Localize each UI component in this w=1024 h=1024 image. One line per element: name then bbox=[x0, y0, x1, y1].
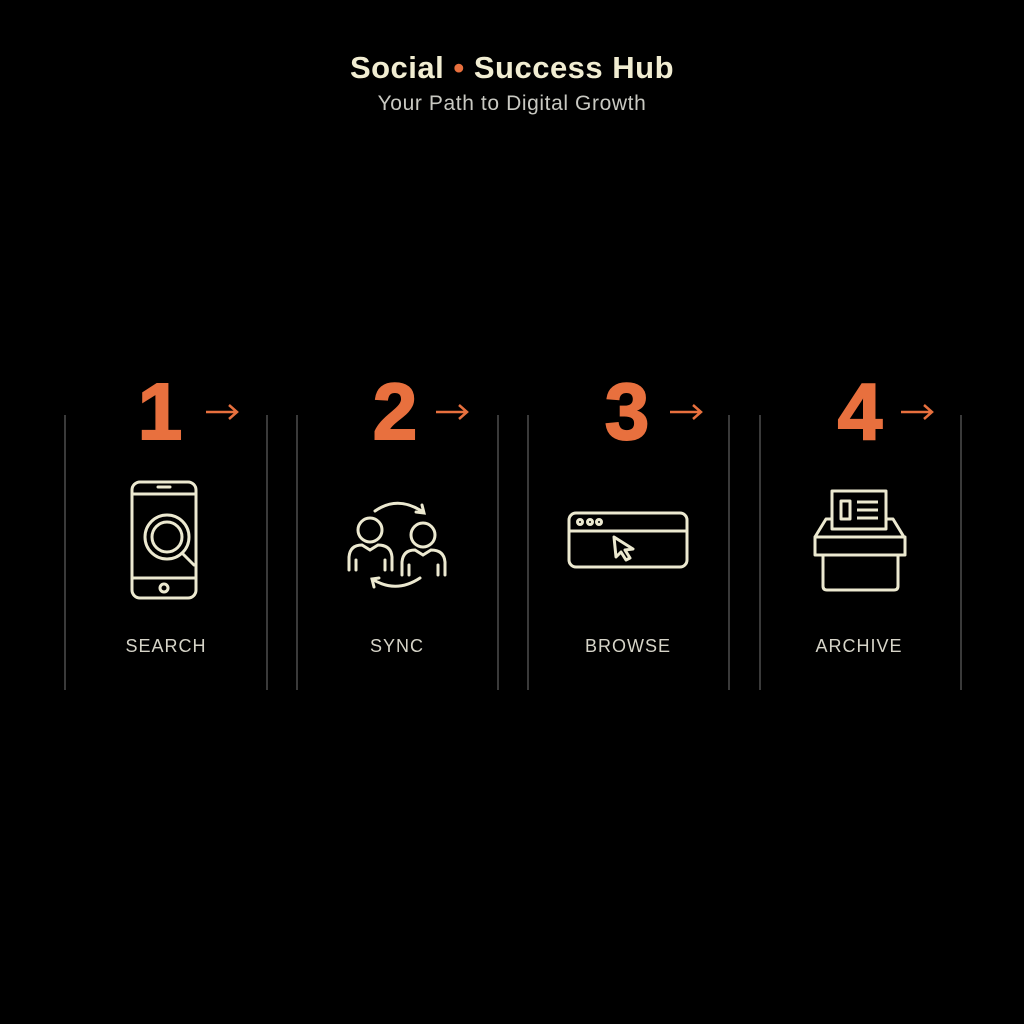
step 1 bbox=[125, 367, 237, 656]
step 3 bbox=[569, 367, 701, 656]
title: Social • Success Hub bbox=[350, 50, 674, 85]
step 3: BROWSE bbox=[585, 636, 671, 656]
icon: users sync bbox=[349, 503, 445, 587]
step 4 bbox=[815, 367, 932, 656]
step 1: 1 bbox=[138, 367, 182, 456]
step 4: ARCHIVE bbox=[815, 636, 903, 656]
step 2 bbox=[349, 367, 467, 656]
step 2: 2 bbox=[373, 367, 417, 456]
subtitle: Your Path to Digital Growth bbox=[378, 92, 646, 115]
icon: browser bbox=[569, 513, 687, 567]
icon: archive box bbox=[815, 491, 905, 590]
step 2: SYNC bbox=[370, 636, 424, 656]
step 1: SEARCH bbox=[125, 636, 207, 656]
step 4: 4 bbox=[838, 367, 883, 456]
step 3: 3 bbox=[605, 367, 649, 456]
icon: phone search bbox=[132, 482, 196, 598]
